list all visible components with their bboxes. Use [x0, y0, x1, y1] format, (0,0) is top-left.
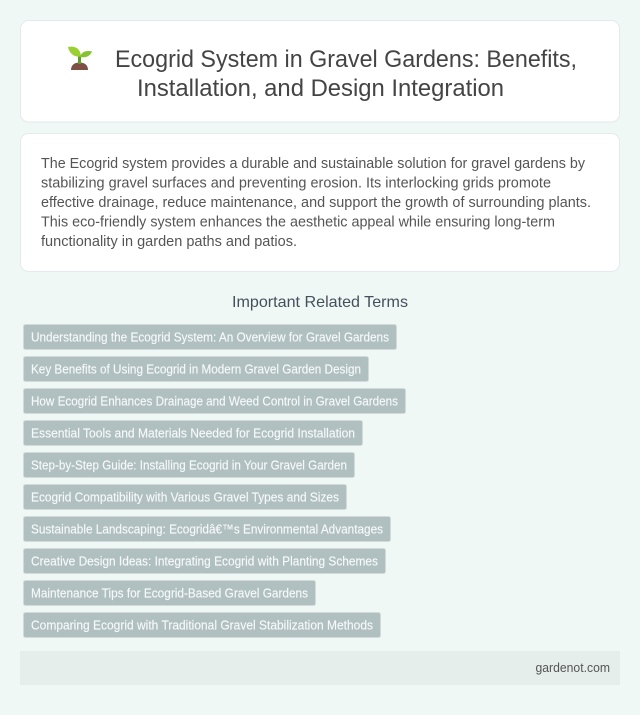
tag 9 [24, 580, 316, 606]
tag 7: Sustainable Landscaping: Ecogridâ€™s Environmental Advantages [31, 522, 383, 536]
description text [41, 155, 591, 250]
title: Installation, and Design Integration [137, 75, 504, 102]
heading: important related terms: Important Related Terms [232, 294, 408, 311]
footer source text: gardenot.com [536, 660, 610, 675]
footer [20, 651, 620, 685]
tag 7 [24, 516, 390, 542]
tag 2 [24, 356, 368, 382]
title: Ecogrid System in Gravel Gardens: Benefits, [115, 46, 577, 73]
tag 6: Ecogrid Compatibility with Various Gravel Types and Sizes [31, 490, 339, 504]
tag 1: Understanding the Ecogrid System: An Overview for Gravel Gardens [31, 330, 389, 344]
tag 10 [24, 612, 380, 638]
tag 5 [24, 452, 354, 478]
tag 8: Creative Design Ideas: Integrating Ecogrid with Planting Schemes [31, 554, 378, 568]
description text: functionality in garden paths and patios. [41, 233, 297, 250]
description text: The Ecogrid system provides a durable and sustainable solution for gravel gardens by [41, 155, 585, 172]
panel: title card [20, 20, 620, 122]
tag 6 [24, 484, 346, 510]
panel: description card [20, 134, 620, 272]
tag 4: Essential Tools and Materials Needed for Ecogrid Installation [31, 426, 355, 440]
description text: effective drainage, reduce maintenance, and support the growth of surrounding plants. [41, 194, 591, 211]
tag 1 [24, 324, 396, 350]
tag 3: How Ecogrid Enhances Drainage and Weed Control in Gravel Gardens [31, 394, 398, 408]
tag 10: Comparing Ecogrid with Traditional Gravel Stabilization Methods [31, 618, 373, 632]
tag 8 [24, 548, 386, 574]
icon: seedling [68, 47, 92, 70]
tag 5: Step-by-Step Guide: Installing Ecogrid in Your Gravel Garden [31, 458, 347, 472]
title [115, 46, 577, 102]
description text: This eco-friendly system enhances the aesthetic appeal while ensuring long-term [41, 214, 555, 230]
tag 3 [24, 388, 406, 414]
tag 2: Key Benefits of Using Ecogrid in Modern Gravel Garden Design [31, 362, 361, 376]
tag 4 [24, 420, 362, 446]
tag 9: Maintenance Tips for Ecogrid-Based Gravel Gardens [31, 586, 308, 600]
description text: stabilizing gravel surfaces and preventing erosion. Its interlocking grids promote [41, 174, 551, 192]
list of related term tags [24, 324, 406, 638]
